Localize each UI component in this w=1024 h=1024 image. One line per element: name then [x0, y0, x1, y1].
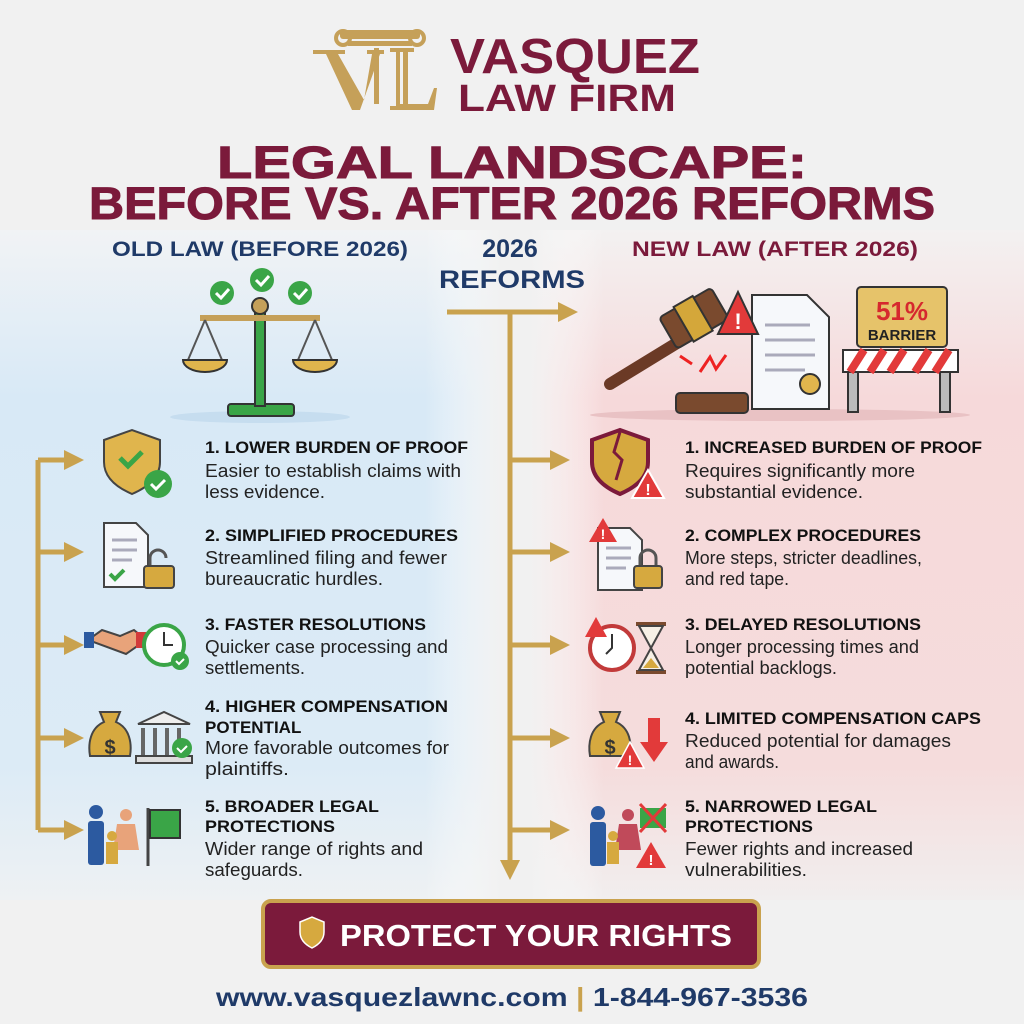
icon: broken shield with warning	[592, 430, 664, 499]
row 4 left: higher compensation potential: POTENTIAL	[205, 718, 301, 737]
button: protect your rights: PROTECT YOUR RIGHTS	[340, 918, 732, 953]
button: protect your rights	[263, 901, 759, 967]
icon: shield check	[104, 430, 172, 498]
row 5 right: narrowed legal protections: PROTECTIONS	[685, 817, 813, 836]
icon: document with open lock	[104, 523, 174, 588]
row 1 right: increased burden of proof: Requires significantly more	[685, 461, 915, 481]
row 3 right: delayed resolutions: Longer processing times and	[685, 637, 919, 657]
icon: document, warning and lock	[589, 518, 662, 590]
title: LEGAL LANDSCAPE:	[217, 137, 807, 188]
row 2 left: simplified procedures: 2. SIMPLIFIED PROCEDURES	[205, 526, 458, 545]
row 4 left: higher compensation potential: 4. HIGHER COMPENSATION	[205, 697, 448, 716]
row 5 left: broader legal protections: Wider range of rights and	[205, 839, 423, 859]
icon: shield	[300, 917, 324, 948]
row 4 right: limited compensation caps	[589, 709, 981, 772]
row 4 right: limited compensation caps: Reduced potential for damages	[685, 731, 951, 751]
row 4 left: higher compensation potential: More favorable outcomes for	[205, 738, 449, 758]
row 2 left: simplified procedures: bureaucratic hurdles.	[205, 569, 383, 589]
row 4 right: limited compensation caps: and awards.	[685, 752, 779, 772]
row 2 right: complex procedures: 2. COMPLEX PROCEDURES	[685, 526, 921, 545]
panel: new law background	[530, 230, 1024, 900]
footer: website and phone: www.vasquezlawnc.com | 1-844-967-3536	[215, 982, 808, 1012]
icon: broken shield with warning: !	[645, 482, 651, 499]
heading: 2026 reforms: REFORMS	[439, 266, 585, 294]
logo: LAW FIRM	[458, 78, 676, 120]
row 4 left: higher compensation potential: plaintiffs.	[205, 759, 289, 779]
row 3 left: faster resolutions: settlements.	[205, 658, 305, 678]
heading: old law: OLD LAW (BEFORE 2026)	[112, 238, 408, 261]
heading: 2026 reforms	[439, 235, 585, 294]
row 5 left: broader legal protections: PROTECTIONS	[205, 817, 335, 836]
icon: family and green flag	[88, 805, 180, 866]
icon: VL column logo	[313, 30, 437, 110]
icon: family with crossed flag and warning	[590, 804, 666, 869]
row 2 right: complex procedures: More steps, stricter deadlines,	[685, 548, 922, 568]
icon: clock with warning and hourglass	[585, 617, 666, 672]
logo	[313, 30, 700, 120]
icon: money bag with down arrow: $	[604, 737, 616, 759]
row 5 right: narrowed legal protections: 5. NARROWED LEGAL	[685, 797, 877, 816]
icon: money bag with down arrow: !	[628, 752, 632, 768]
heading: 2026 reforms: 2026	[482, 235, 538, 263]
title	[89, 137, 935, 229]
row 3 left: faster resolutions	[84, 615, 448, 678]
panel: old law background	[0, 230, 500, 900]
row 1 left: lower burden of proof: Easier to establish claims with	[205, 461, 461, 481]
row 1 right: increased burden of proof: 1. INCREASED BURDEN OF PROOF	[685, 438, 982, 457]
row 2 left: simplified procedures	[104, 523, 458, 589]
row 3 right: delayed resolutions	[585, 615, 921, 678]
row 1 right: increased burden of proof: substantial evidence.	[685, 482, 863, 502]
icon: gavel, broken document, 51% barrier: 51%	[876, 296, 928, 326]
row 4 left: higher compensation potential	[89, 697, 449, 779]
row 3 left: faster resolutions: 3. FASTER RESOLUTIONS	[205, 615, 426, 634]
row 5 right: narrowed legal protections: vulnerabilities.	[685, 860, 807, 880]
row 1 left: lower burden of proof	[104, 430, 468, 502]
row 2 left: simplified procedures: Streamlined filing and fewer	[205, 548, 447, 568]
row 4 right: limited compensation caps: 4. LIMITED COMPENSATION CAPS	[685, 709, 981, 728]
row 3 right: delayed resolutions: 3. DELAYED RESOLUTIONS	[685, 615, 921, 634]
title: BEFORE VS. AFTER 2026 REFORMS	[89, 178, 935, 229]
row 5 left: broader legal protections	[88, 797, 423, 880]
row 5 left: broader legal protections: 5. BROADER LEGAL	[205, 797, 379, 816]
icon: gavel, broken document, 51% barrier: !	[734, 309, 742, 334]
icon: document, warning and lock: !	[601, 526, 605, 542]
heading: new law: NEW LAW (AFTER 2026)	[632, 238, 918, 261]
row 5 left: broader legal protections: safeguards.	[205, 860, 303, 880]
row 3 right: delayed resolutions: potential backlogs.	[685, 658, 837, 678]
icon: money bag and bank	[89, 712, 192, 763]
icon: handshake and clock	[84, 625, 189, 670]
row 5 right: narrowed legal protections	[590, 797, 913, 880]
arrows: timeline	[38, 312, 570, 872]
row 1 left: lower burden of proof: 1. LOWER BURDEN OF PROOF	[205, 438, 468, 457]
row 2 right: complex procedures	[589, 518, 922, 590]
icon: money bag and bank: $	[104, 737, 116, 759]
icon: scales of justice with checks	[170, 268, 350, 423]
row 1 right: increased burden of proof	[592, 430, 982, 502]
icon: money bag with down arrow	[589, 712, 668, 768]
row 1 left: lower burden of proof: less evidence.	[205, 482, 325, 502]
row 3 left: faster resolutions: Quicker case processing and	[205, 637, 448, 657]
row 5 right: narrowed legal protections: Fewer rights and increased	[685, 839, 913, 859]
icon: family with crossed flag and warning: !	[648, 852, 654, 869]
icon: gavel, broken document, 51% barrier	[590, 286, 970, 421]
row 2 right: complex procedures: and red tape.	[685, 569, 789, 589]
icon: gavel, broken document, 51% barrier: BARRIER	[868, 327, 936, 344]
heading: firm name: VASQUEZ	[450, 30, 700, 84]
